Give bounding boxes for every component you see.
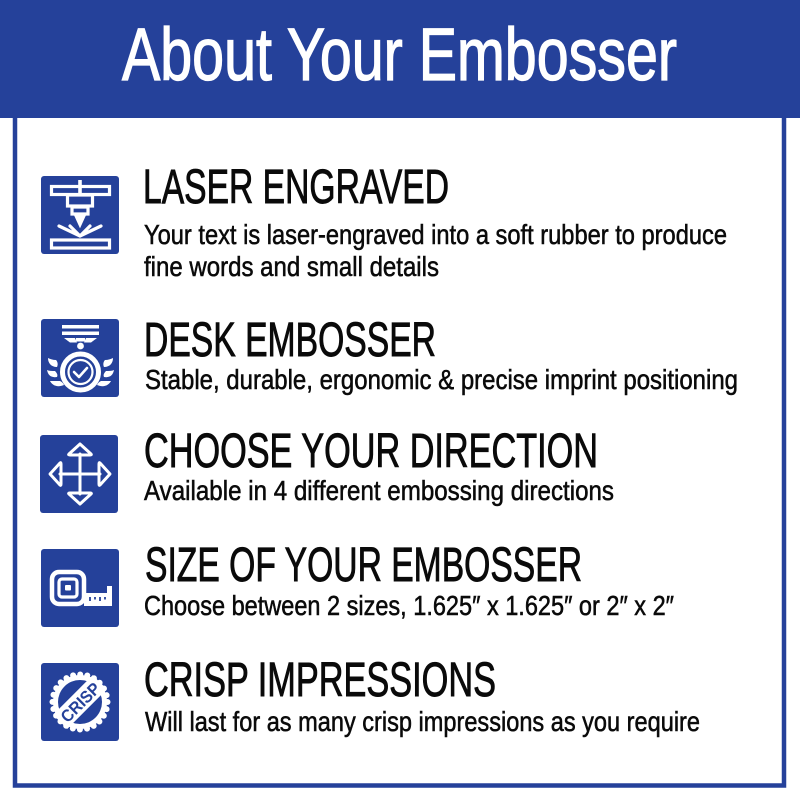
heading: DESK EMBOSSER [144,314,436,367]
icon: laser engraver [41,176,119,254]
item: choose your direction [40,425,614,513]
header band [0,0,800,118]
heading: SIZE OF YOUR EMBOSSER [145,539,582,592]
item: desk embosser [41,314,738,397]
item: laser engraved [41,161,727,282]
description: Choose between 2 sizes, 1.625″ x 1.625″ or 2″ x 2″ [144,590,674,621]
item: size of your embosser [41,539,674,627]
icon: crisp stamp [41,663,119,741]
heading: CRISP IMPRESSIONS [144,654,496,707]
item: crisp impressions [41,654,700,741]
icon: crisp stamp: CRISP [57,679,104,726]
icon: medal [41,319,119,397]
icon: four-way arrows [40,435,118,513]
description: Will last for as many crisp impressions as you require [145,706,700,737]
description [144,219,727,282]
description: Available in 4 different embossing directions [144,475,614,506]
icon: tape measure [41,549,119,627]
heading: LASER ENGRAVED [143,161,449,214]
heading: CHOOSE YOUR DIRECTION [144,425,598,478]
description: fine words and small details [144,251,439,282]
